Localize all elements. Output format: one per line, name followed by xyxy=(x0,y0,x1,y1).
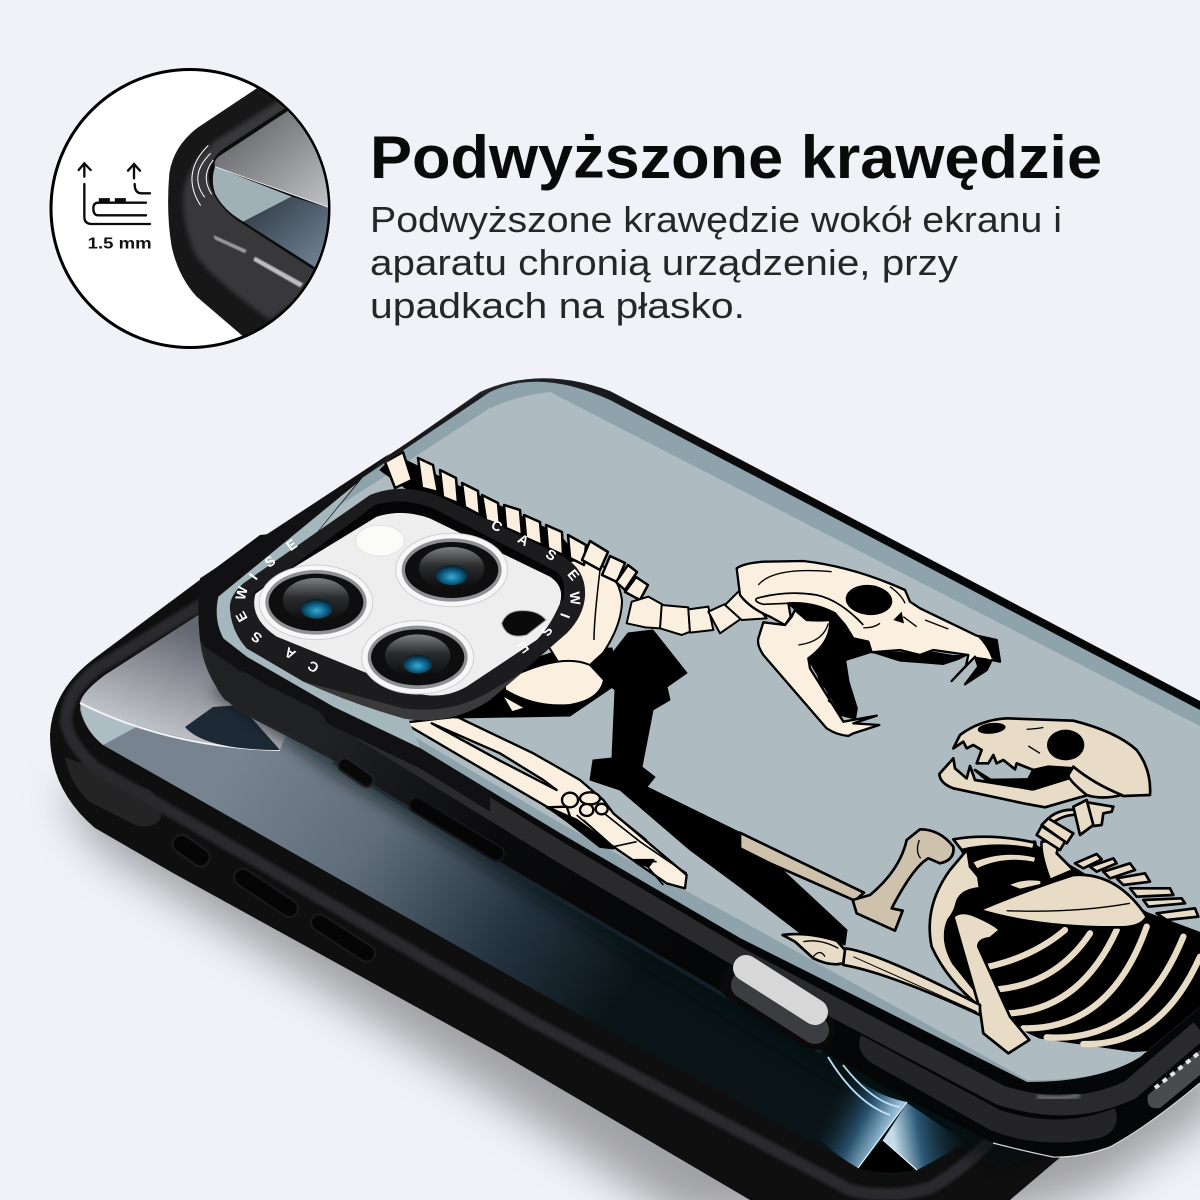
lower dog paw xyxy=(783,934,845,964)
lower dog near arm xyxy=(740,829,953,931)
lower dog skull xyxy=(953,718,1150,797)
back phone buttons xyxy=(182,844,367,953)
camera translucent patch xyxy=(205,647,328,749)
lower dog upper arm xyxy=(953,913,1029,1053)
shadow under phones xyxy=(60,700,1200,1200)
upper dog torso xyxy=(454,648,614,718)
back phone case xyxy=(50,500,1200,1200)
front phone case xyxy=(200,378,1200,1157)
casewise ring lettering: I xyxy=(245,570,261,583)
lower dog forearm xyxy=(843,948,980,1015)
casewise ring lettering: E xyxy=(515,638,532,657)
flash xyxy=(356,525,404,556)
casewise ring lettering xyxy=(232,516,584,676)
casewise ring lettering: W xyxy=(567,591,584,606)
lidar sensor xyxy=(502,611,546,636)
casewise ring lettering: C xyxy=(488,516,505,535)
front phone buttons xyxy=(345,765,497,853)
circular detail inset xyxy=(51,70,340,348)
lower dog left chest xyxy=(930,849,980,1007)
front rim highlight xyxy=(215,640,1200,1105)
body text xyxy=(370,199,1062,326)
upper dog neck xyxy=(627,588,767,635)
lower dog upper ribs xyxy=(953,837,1035,850)
icon: raised edge 1.5 mm xyxy=(79,163,152,252)
camera ring xyxy=(230,489,585,720)
upper dog spine xyxy=(380,455,580,570)
upper dog skull xyxy=(737,561,1000,736)
lower dog shoulder blade xyxy=(979,875,1147,927)
upper dog foreleg xyxy=(403,717,687,888)
body text: aparatu chronią urządzenie, przy xyxy=(370,242,958,283)
back phone screen xyxy=(80,598,1000,1174)
bottom corner reflection xyxy=(800,1057,967,1173)
casewise ring lettering: S xyxy=(543,545,559,564)
casewise ring lettering: S xyxy=(261,552,278,571)
front top edge xyxy=(200,398,484,586)
heading: Podwyższone krawędzie xyxy=(370,124,1102,191)
camera bump wall xyxy=(198,453,490,812)
corner bumper patch xyxy=(65,757,161,827)
casewise ring lettering: A xyxy=(281,644,298,663)
casewise ring lettering: I xyxy=(557,611,573,620)
casewise ring lettering: W xyxy=(232,584,251,602)
casewise ring lettering: E xyxy=(564,566,583,583)
lens 1 xyxy=(259,565,373,640)
upper dog back leg xyxy=(590,630,847,945)
lens 2 xyxy=(396,533,508,607)
body text: Podwyższone krawędzie wokół ekranu i xyxy=(370,199,1062,240)
lower dog spine xyxy=(1075,854,1102,868)
body text: upadkach na płasko. xyxy=(370,285,745,326)
lens 3 xyxy=(362,621,474,694)
casewise ring lettering: E xyxy=(283,535,300,554)
lower dog neck xyxy=(1083,802,1113,826)
lower dog skeleton xyxy=(740,718,1200,1053)
icon: raised edge 1.5 mm: 1.5 mm xyxy=(88,235,152,252)
casewise ring lettering: S xyxy=(538,622,556,640)
casewise ring lettering: S xyxy=(248,628,265,647)
lower dog jaw xyxy=(939,758,1088,807)
casewise ring lettering: E xyxy=(232,609,251,625)
front phone shadow on back screen xyxy=(210,640,1100,1170)
casewise ring lettering: C xyxy=(305,657,322,676)
front phone charging port xyxy=(740,968,815,1030)
camera module xyxy=(198,453,585,812)
speaker grille xyxy=(1148,1050,1200,1108)
bumper patch bottom xyxy=(859,1035,1117,1142)
lower dog ribcage xyxy=(944,847,1200,1051)
skeleton illustration xyxy=(380,452,1200,1053)
camera window xyxy=(254,513,561,696)
casewise ring lettering: A xyxy=(515,530,532,549)
front screen xyxy=(225,382,1200,1082)
